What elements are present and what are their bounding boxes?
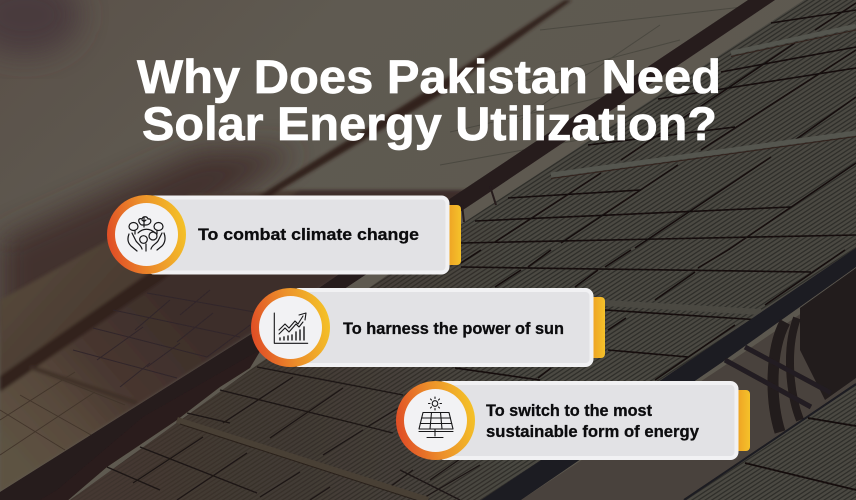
tab: card 3 — [738, 390, 750, 451]
card body 1 — [148, 198, 448, 272]
label 3: sustainable form of energy — [486, 422, 700, 441]
icon circle 3 — [404, 389, 467, 452]
label 3: To switch to the most — [486, 401, 652, 420]
title: Solar Energy Utilization? — [142, 98, 717, 151]
icon circle 1 — [115, 203, 178, 266]
tab: card 2 — [593, 297, 605, 358]
card 2: harness the power of sun — [251, 288, 605, 367]
label 3 — [486, 401, 700, 441]
ring 2 — [251, 288, 330, 367]
title — [137, 51, 721, 151]
ring 1 — [107, 195, 186, 274]
mounting rails — [177, 26, 856, 500]
icon: sun above solar panel — [419, 397, 453, 438]
label 1: To combat climate change — [198, 225, 419, 244]
card body 3 — [438, 383, 736, 458]
ring 3 — [396, 381, 475, 460]
title: Why Does Pakistan Need — [137, 51, 721, 104]
upper roof panel ghost lines — [440, 5, 760, 165]
lower right beam and frame — [481, 248, 856, 500]
upper left tile grid — [73, 290, 260, 387]
card 1: combat climate change — [107, 195, 461, 274]
card 3: most sustainable energy — [396, 381, 750, 460]
card body 2 — [293, 290, 592, 365]
dark gap under main beam — [30, 348, 262, 500]
label 2: To harness the power of sun — [343, 319, 564, 338]
icon: hands holding trees — [128, 217, 165, 251]
icon: rising growth chart — [274, 313, 308, 343]
tab: card 1 — [449, 205, 461, 265]
icon circle 2 — [259, 296, 322, 359]
